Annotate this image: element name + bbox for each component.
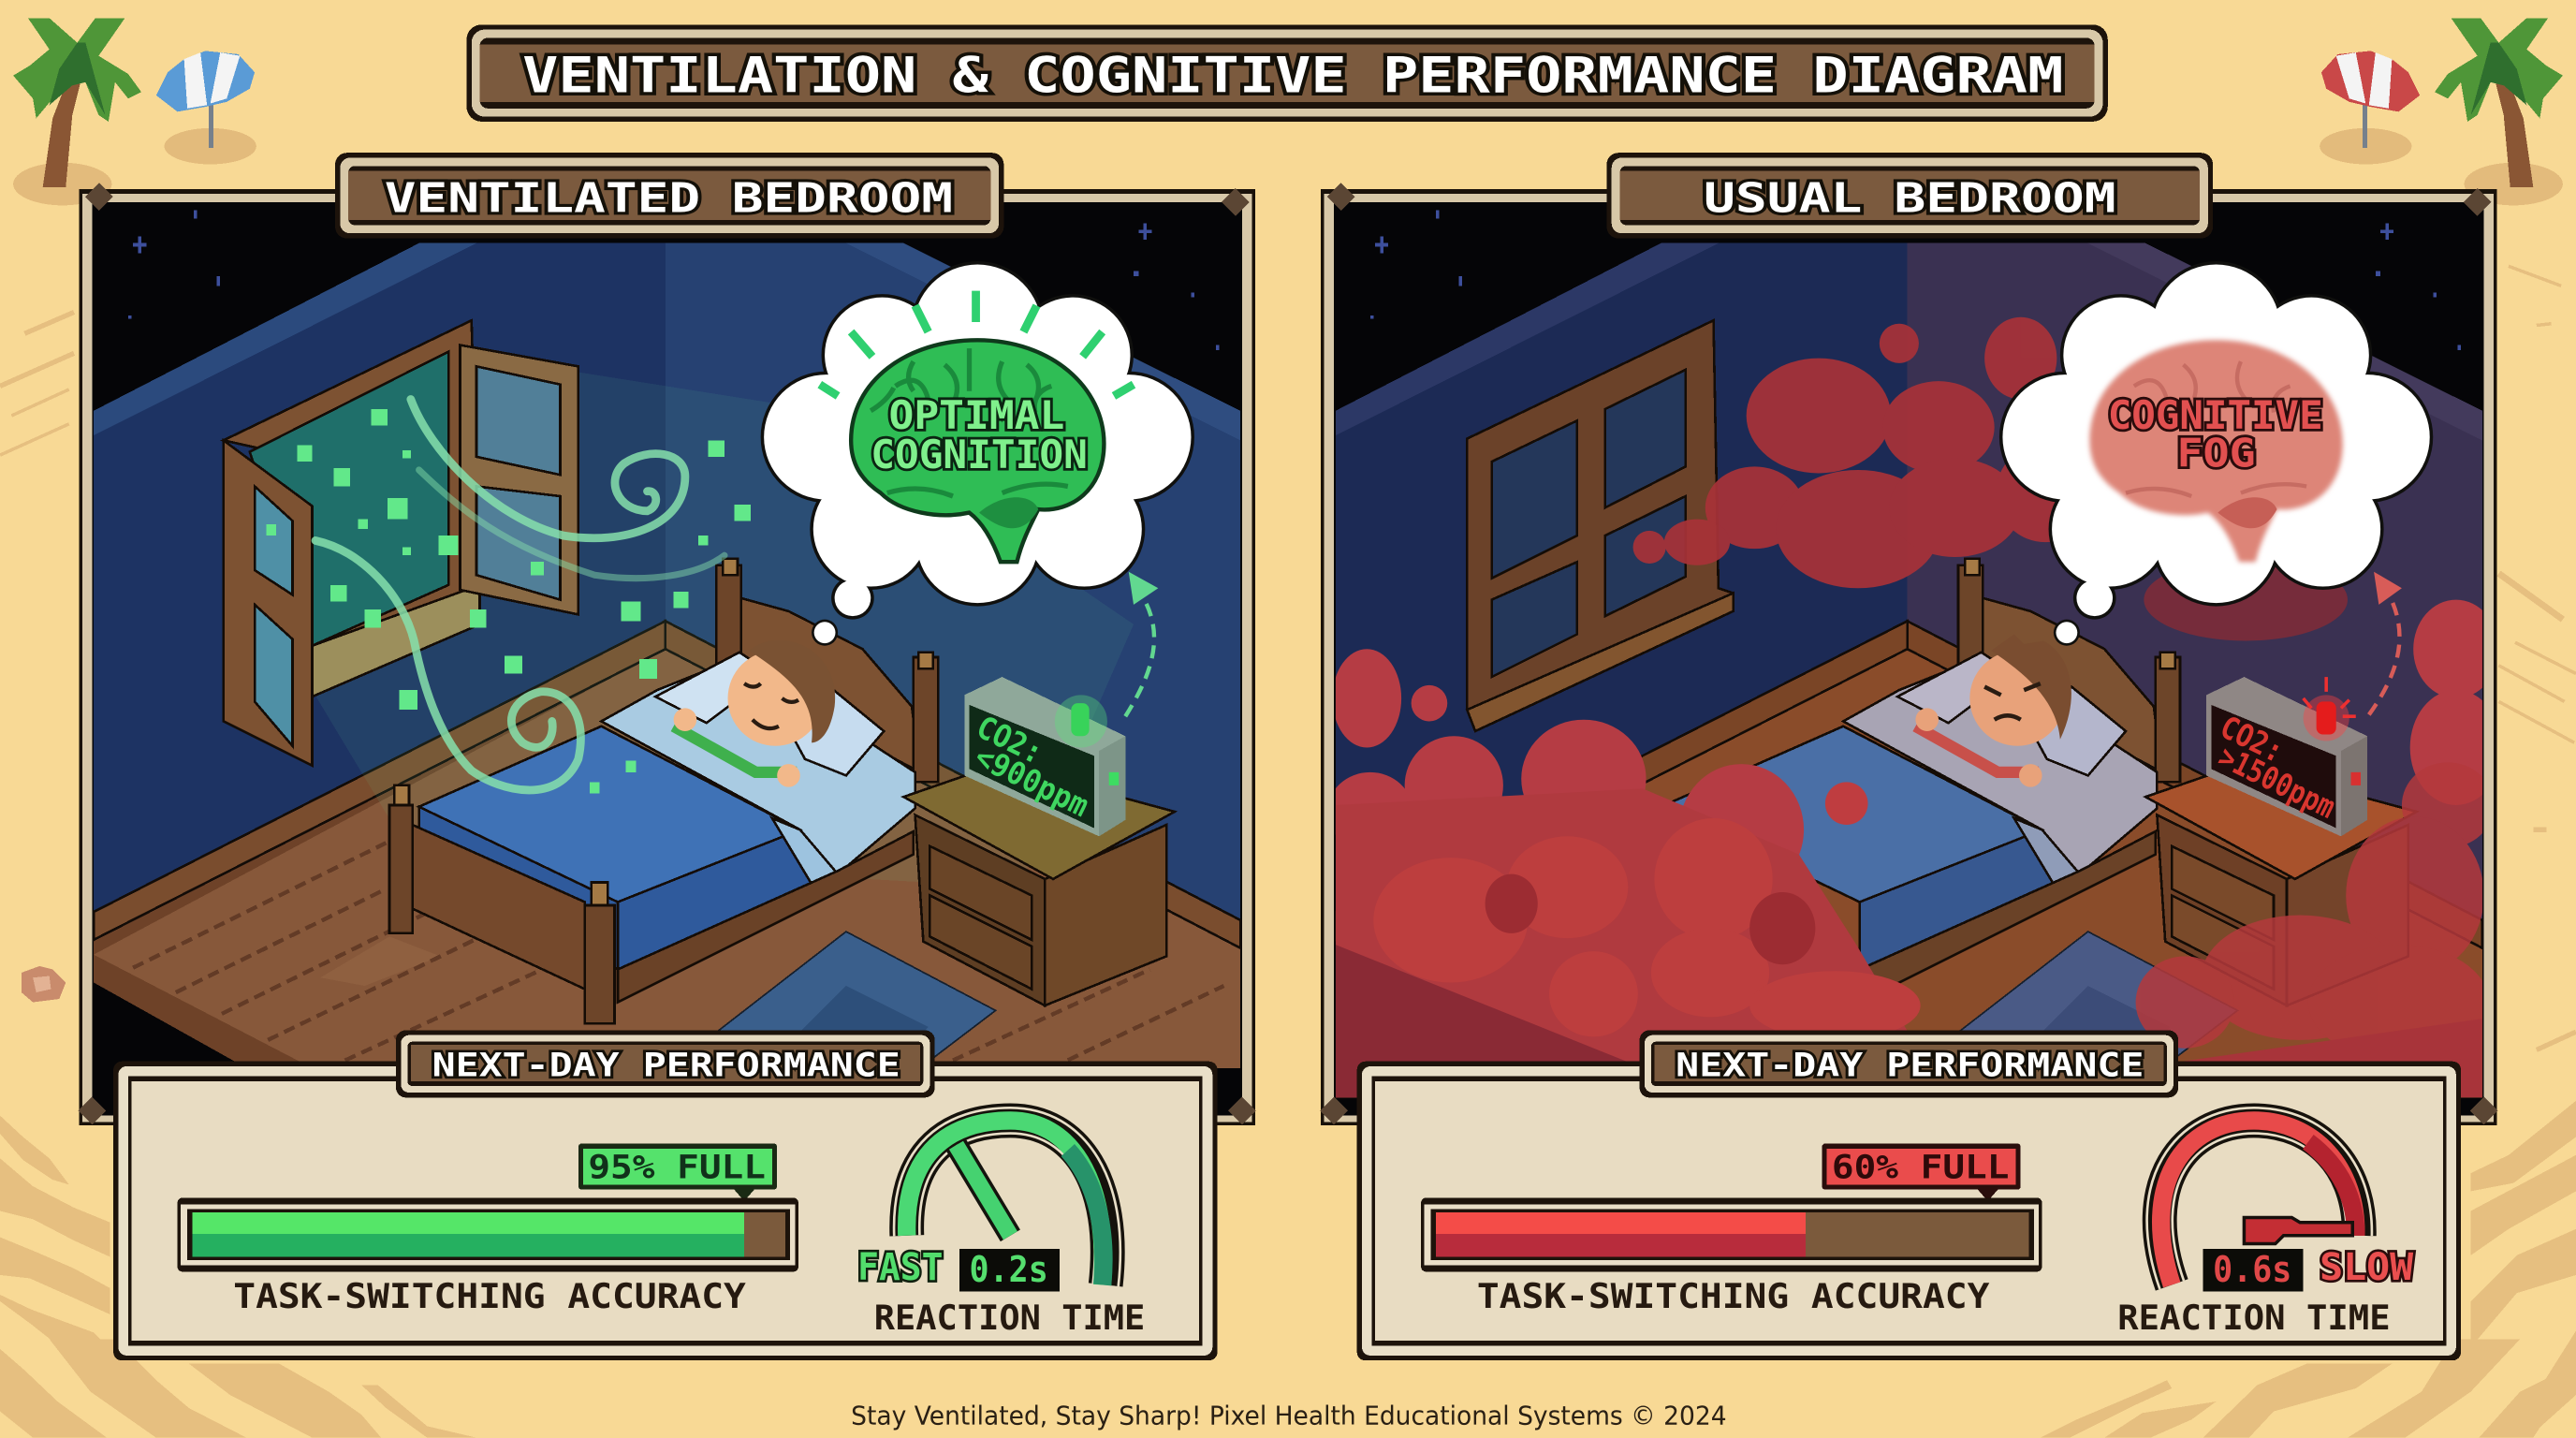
bed — [389, 559, 938, 1023]
window: open — [224, 320, 578, 766]
nightstand — [2145, 764, 2417, 1005]
accuracy callout: 60% full — [1822, 1143, 2021, 1201]
label: reaction time: REACTION TIME — [2117, 1298, 2391, 1338]
reaction time gauge — [2159, 1121, 2359, 1284]
brain: cognitive fog: FOG — [2176, 430, 2256, 476]
nightstand — [903, 764, 1175, 1005]
thought bubble — [1999, 261, 2433, 646]
accuracy bar — [178, 1197, 798, 1271]
label: fast: FAST — [857, 1245, 943, 1289]
thought bubble — [761, 261, 1194, 646]
room: walls and floor — [94, 243, 1240, 1068]
accuracy callout: 95% full: 95% FULL — [588, 1148, 766, 1186]
accuracy bar — [1421, 1197, 2042, 1271]
sleeping person — [674, 640, 835, 787]
CO2 monitor: <900ppm — [970, 738, 1094, 824]
CO2 fog cloud: lower — [1327, 600, 2502, 1097]
brain: optimal cognition: COGNITION — [871, 432, 1088, 477]
accuracy callout: 95% full — [578, 1143, 777, 1201]
CO2 fog cloud: upper — [1633, 317, 2348, 640]
night sky stars — [1370, 211, 2461, 350]
CO2 monitor: CO2: — [2215, 709, 2290, 770]
plaque: next-day performance: NEXT-DAY PERFORMANCE — [1676, 1047, 2144, 1085]
room: walls and floor — [1336, 243, 2482, 1097]
heading plaque: usual bedroom: USUAL BEDROOM — [1704, 174, 2116, 222]
icon: right palm tree — [2435, 18, 2563, 205]
night sky stars — [128, 211, 1219, 350]
CO2 monitor — [964, 677, 1125, 836]
brain: optimal cognition — [820, 291, 1134, 562]
brain: cognitive fog — [2089, 340, 2343, 562]
brain: optimal cognition: OPTIMAL — [889, 392, 1064, 438]
CO2 monitor: >1500ppm — [2213, 738, 2341, 826]
title — [466, 24, 2108, 122]
air swirls — [315, 399, 724, 790]
plaque: next-day performance — [1640, 1030, 2178, 1097]
icon: blue umbrella — [156, 51, 256, 165]
panel: ventilated bedroom — [78, 153, 1256, 1360]
panel: usual bedroom — [1320, 153, 2502, 1360]
plaque: next-day performance — [396, 1030, 935, 1097]
plaque: next-day performance: NEXT-DAY PERFORMANCE — [432, 1047, 900, 1085]
icon: red umbrella — [2320, 51, 2420, 165]
bed — [1661, 559, 2180, 1003]
label: reaction time: REACTION TIME — [874, 1298, 1145, 1338]
accuracy callout: 60% full: 60% FULL — [1832, 1148, 2009, 1186]
heading plaque: usual bedroom — [1606, 153, 2213, 238]
CO2 monitor — [2206, 677, 2367, 836]
footer credit: Stay Ventilated, Stay Sharp! Pixel Health Educational Systems © 2024 — [851, 1402, 1727, 1431]
reaction time gauge — [907, 1121, 1107, 1284]
brain: cognitive fog: COGNITIVE — [2108, 392, 2323, 438]
heading plaque: ventilated bedroom: VENTILATED BEDROOM — [385, 174, 953, 222]
arrow: monitor to thought — [1125, 572, 1158, 716]
icon: shell — [22, 966, 66, 1003]
restless person — [1915, 634, 2071, 787]
CO2 monitor: CO2: — [971, 709, 1049, 771]
arrow: monitor to thought — [2369, 572, 2402, 714]
icon: left palm tree — [13, 18, 141, 205]
value: 0.2s: 0.2s — [970, 1249, 1048, 1291]
label: slow: SLOW — [2320, 1245, 2414, 1289]
label: task-switching accuracy: TASK-SWITCHING ACCURACY — [1477, 1276, 1990, 1316]
panel: next-day performance — [1357, 1030, 2461, 1360]
panel frame — [1320, 183, 2498, 1125]
panel: next-day performance — [113, 1030, 1218, 1360]
window: closed — [1467, 320, 1734, 731]
title: VENTILATION & COGNITIVE PERFORMANCE DIAGRAM — [522, 47, 2063, 104]
label: task-switching accuracy: TASK-SWITCHING ACCURACY — [233, 1276, 747, 1316]
panel frame — [78, 183, 1256, 1125]
fresh air particles — [266, 409, 751, 794]
value: 0.6s: 0.6s — [2213, 1249, 2291, 1291]
heading plaque: ventilated bedroom — [335, 153, 1003, 238]
